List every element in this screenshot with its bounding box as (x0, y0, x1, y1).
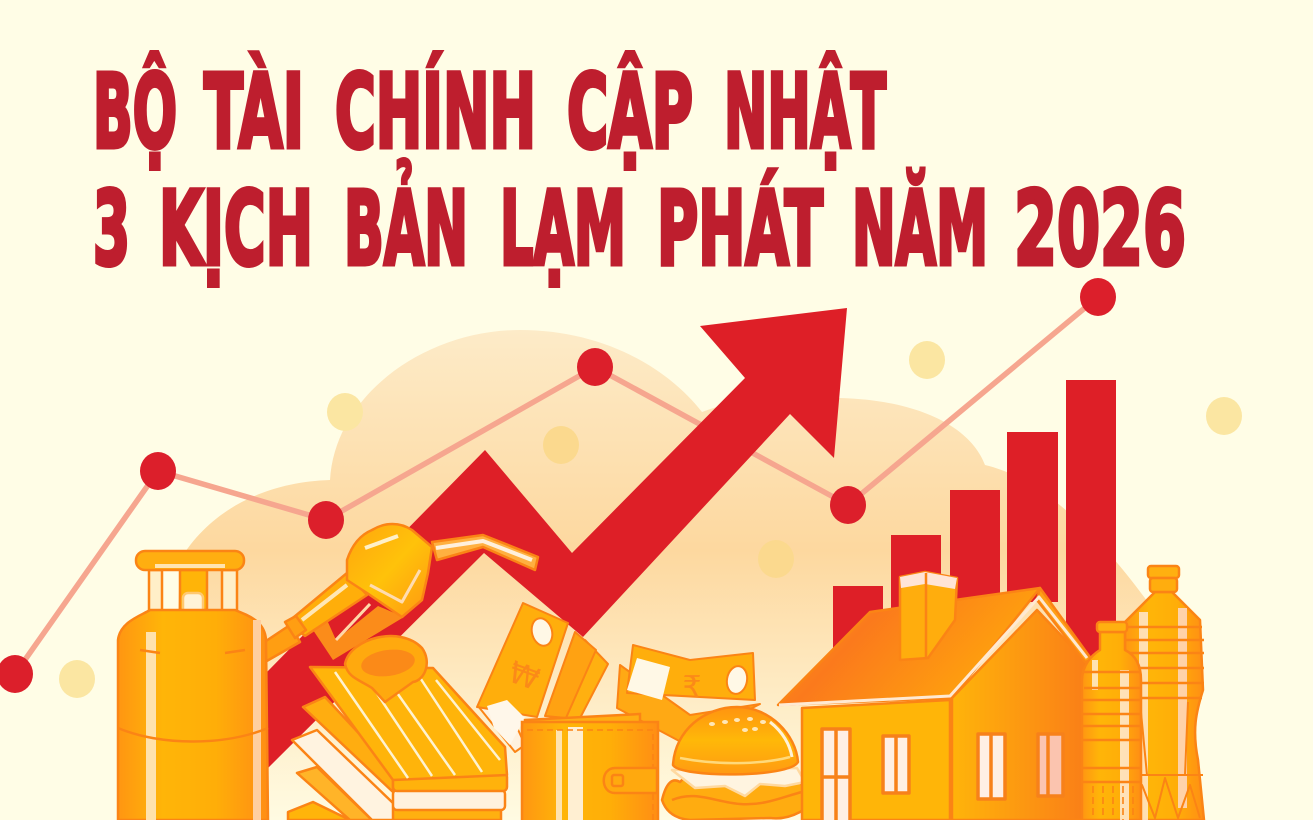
line chart (0, 278, 1116, 693)
icon: banknote stack: ₹ (682, 670, 702, 705)
title: 3 (93, 170, 130, 289)
title: PHÁT (657, 169, 823, 289)
icon: gas cylinder (118, 551, 268, 820)
title: NHẬT (724, 53, 886, 172)
icon: house (778, 572, 1092, 820)
icon: small oil bottle (1082, 622, 1141, 820)
icon: burger (662, 707, 808, 820)
title: CHÍNH (335, 52, 536, 172)
title: BỘ (93, 53, 177, 172)
pale decorative dots (59, 341, 1242, 698)
icon: banknotes fan: ₩ (504, 655, 544, 698)
bar chart (833, 380, 1116, 670)
title: KỊCH (159, 170, 313, 289)
icon: folded shirts (288, 636, 507, 820)
title (93, 52, 1186, 289)
peach cloud backdrop (170, 330, 1200, 820)
rising red arrow (267, 308, 847, 768)
icon: wallet (522, 714, 658, 820)
icon: large oil bottle (1125, 566, 1204, 820)
title: LẠM (500, 170, 626, 289)
title: BẢN (344, 159, 468, 289)
icon: banknotes fan (477, 603, 608, 752)
title: CẬP (567, 53, 693, 172)
icon: fuel nozzle (263, 524, 538, 662)
icon: banknote stack (617, 645, 760, 743)
title: NĂM (852, 168, 988, 289)
title: 2026 (1014, 170, 1186, 289)
title: TÀI (204, 52, 304, 172)
